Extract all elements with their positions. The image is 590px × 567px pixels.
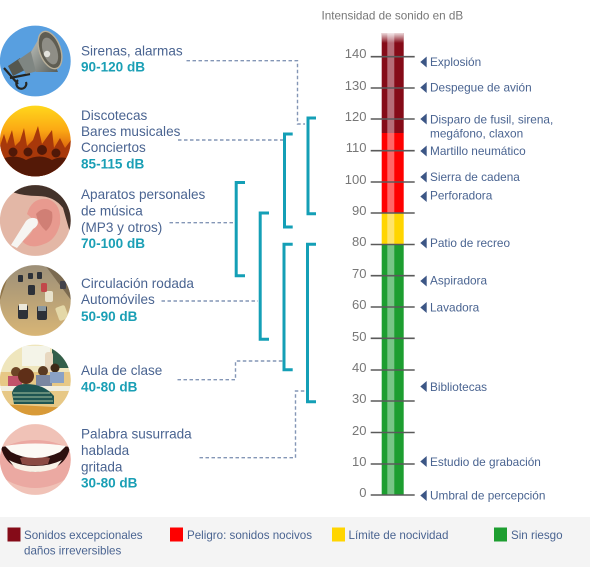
scale example labels: Despegue de avión — [430, 80, 532, 94]
scale numbers: 10 — [352, 454, 366, 469]
scale numbers: 60 — [352, 297, 366, 312]
scale example labels: Disparo de fusil, sirena, — [430, 112, 553, 126]
scale numbers: 40 — [352, 360, 366, 375]
text: road traffic: 50-90 dB — [81, 309, 138, 324]
scale example labels: Sierra de cadena — [430, 170, 520, 184]
scale example labels: megáfono, claxon — [430, 126, 523, 140]
legend: Sin riesgo — [511, 529, 563, 542]
text: sirens — [81, 44, 183, 75]
text: speech: Palabra susurrada — [81, 427, 192, 442]
scale numbers: 120 — [345, 109, 366, 124]
legend — [0, 517, 590, 567]
range brackets — [236, 118, 316, 402]
arrow markers — [420, 56, 427, 501]
text: discos — [81, 108, 181, 172]
photo: smiling mouth — [0, 424, 71, 496]
scale numbers: 90 — [352, 203, 366, 218]
scale ticks — [371, 57, 415, 495]
text: speech — [81, 427, 192, 491]
scale numbers: 30 — [352, 391, 366, 406]
scale title: Intensidad de sonido en dB — [322, 10, 463, 23]
legend: Sonidos excepcionales — [24, 529, 143, 542]
thermometer bar — [382, 33, 404, 495]
text: classroom: Aula de clase — [81, 363, 162, 378]
text: speech: 30-80 dB — [81, 476, 138, 491]
scale numbers: 20 — [352, 423, 366, 438]
scale numbers: 50 — [352, 329, 366, 344]
text: road traffic — [81, 276, 194, 324]
text: personal music devices: de música — [81, 203, 143, 218]
photo: classroom — [0, 344, 72, 416]
text: classroom: 40-80 dB — [81, 380, 138, 395]
text: personal music devices: 70-100 dB — [81, 236, 145, 251]
text: personal music devices — [81, 187, 205, 251]
photo: concert crowd — [0, 105, 71, 177]
scale example labels: Perforadora — [430, 188, 493, 202]
scale numbers: 140 — [345, 46, 366, 61]
scale example labels: Explosión — [430, 55, 481, 69]
scale example labels: Lavadora — [430, 301, 480, 315]
text: discos: Discotecas — [81, 108, 147, 123]
text: classroom — [81, 363, 162, 395]
scale numbers: 130 — [345, 78, 366, 93]
scale example labels — [430, 55, 553, 502]
text: sirens: 90-120 dB — [81, 60, 145, 75]
text: discos: Bares musicales — [81, 124, 181, 139]
scale numbers: 70 — [352, 266, 366, 281]
text: road traffic: Automóviles — [81, 292, 155, 307]
text: discos: Conciertos — [81, 140, 146, 155]
text: personal music devices: (MP3 y otros) — [81, 220, 162, 235]
photo: road traffic — [0, 265, 71, 337]
text: speech: hablada — [81, 443, 130, 458]
scale example labels: Aspiradora — [430, 274, 487, 288]
text: road traffic: Circulación rodada — [81, 276, 194, 291]
scale numbers — [345, 46, 366, 500]
scale example labels: Bibliotecas — [430, 380, 487, 394]
scale numbers: 100 — [345, 172, 366, 187]
text: personal music devices: Aparatos personales — [81, 187, 205, 202]
scale example labels: Estudio de grabación — [430, 455, 541, 469]
dashed connectors — [162, 61, 306, 458]
scale numbers: 80 — [352, 234, 366, 249]
text: discos: 85-115 dB — [81, 157, 144, 172]
scale example labels: Patio de recreo — [430, 236, 510, 250]
photo: megaphone siren — [0, 25, 71, 97]
scale example labels: Umbral de percepción — [430, 488, 545, 502]
legend: Peligro: sonidos nocivos — [187, 529, 312, 542]
photo: ear with earphone — [0, 185, 71, 257]
scale numbers: 110 — [346, 140, 366, 155]
legend: daños irreversibles — [24, 545, 122, 558]
text: sirens: Sirenas, alarmas — [81, 44, 183, 58]
scale numbers: 0 — [359, 485, 366, 500]
scale example labels: Martillo neumático — [430, 144, 526, 158]
legend: Límite de nocividad — [348, 529, 448, 542]
text: speech: gritada — [81, 460, 123, 475]
